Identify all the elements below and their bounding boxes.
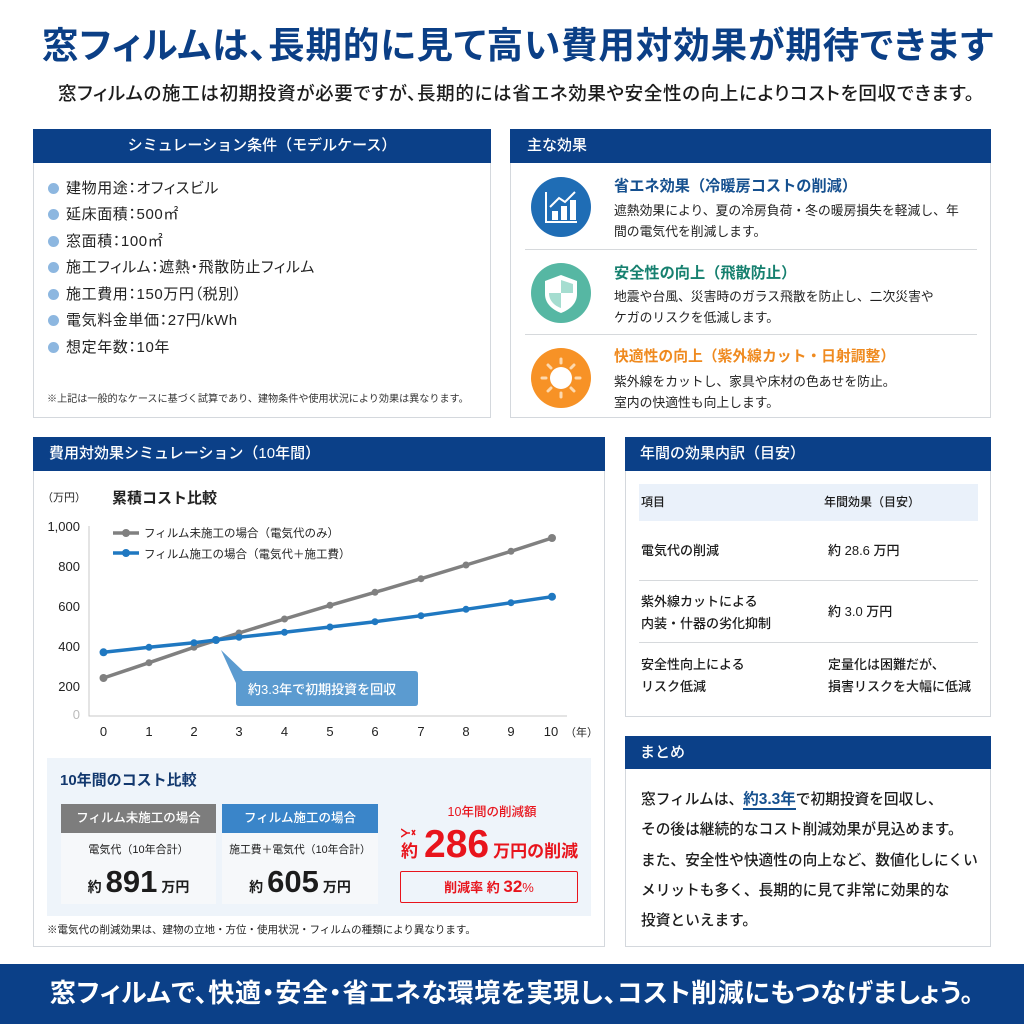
list: conditions: 建物用途：オフィスビル [66,180,219,197]
chart: cumulative cost [42,489,598,739]
summary text: メリットも多く、長期的に見て非常に効果的な [641,883,949,899]
heading: summary: まとめ [640,744,685,761]
summary text: 投資といえます。 [641,913,757,929]
callout [221,650,418,706]
summary text: また、安全性や快適性の向上など、数値化しにくい [641,853,978,869]
callout: 約3.3年で初期投資を回収 [248,682,396,697]
card: without film: 電気代（10年合計） [88,844,189,856]
chart: cumulative cost: 3 [235,724,243,739]
savings: 10年間の削減額 [448,805,536,819]
card: with film: 約605 万円 [249,864,351,899]
list: conditions [48,180,315,356]
panel: annual breakdown [625,437,991,717]
savings: 約286万円の削減 [401,823,578,866]
chart: cumulative cost: 6 [371,724,379,739]
effect text: comfort [614,374,896,410]
table: 年間効果（目安） [824,495,920,509]
footer banner [0,964,1024,1024]
chart: cumulative cost: 10 [544,724,558,739]
table: 損害リスクを大幅に低減 [828,679,971,694]
effect text: safety: ケガのリスクを低減します。 [614,310,779,324]
effect text: comfort: 室内の快適性も向上します。 [614,394,779,410]
chart: cumulative cost: 5 [326,724,334,739]
list: conditions: 施工フィルム：遮熱・飛散防止フィルム [66,259,315,276]
effect text: safety: 地震や台風、災害時のガラス飛散を防止し、二次災害や [614,289,934,304]
summary text: 窓フィルムは、約3.3年で初期投資を回収し、 [641,791,943,808]
chart: cumulative cost: 累積コスト比較 [112,489,217,507]
panel: main effects [510,129,991,418]
table: 定量化は困難だが、 [828,657,945,672]
heading: comparison: 10年間のコスト比較 [60,772,197,789]
icon: energy chart [531,177,591,237]
note: conditions: ※上記は一般的なケースに基づく試算であり、建物条件や使用状況により効果は異なります。 [47,394,469,405]
savings [400,805,578,903]
effect heading: energy: 省エネ効果（冷暖房コストの削減） [614,178,857,195]
panel: simulation [33,437,605,947]
list: conditions: 電気料金単価：27円/kWh [66,312,238,329]
card: with film: フィルム施工の場合 [244,811,356,825]
heading: simulation [33,437,605,471]
heading: breakdown: 年間の効果内訳（目安） [640,445,805,462]
line: with film [100,593,556,656]
table: 項目 [641,495,665,509]
heading: summary [625,736,991,769]
list: conditions: 想定年数：10年 [66,339,170,356]
card: without film [61,804,216,904]
table: 内装・什器の劣化抑制 [641,616,771,631]
legend: フィルム未施工の場合（電気代のみ） [144,526,339,540]
list: conditions: 施工費用：150万円（税別） [66,286,242,303]
table: 約 3.0 万円 [828,604,892,619]
list: conditions: 窓面積：100㎡ [66,233,163,250]
chart: cumulative cost: 200 [58,679,80,694]
panel: simulation conditions [33,129,491,418]
panel: 10-year comparison [47,758,591,916]
savings: 削減率 約 32% [444,877,534,896]
note: comparison: ※電気代の削減効果は、建物の立地・方位・使用状況・フィルムの種類により異なります。 [47,924,476,936]
footer banner: 窓フィルムで、快適・安全・省エネな環境を実現し、コスト削減にもつなげましょう。 [50,978,974,1008]
chart: cumulative cost: 2 [190,724,198,739]
effect text: safety [614,289,934,324]
chart: cumulative cost: 400 [58,639,80,654]
table: リスク低減 [641,679,706,694]
legend [113,526,351,561]
table [639,484,978,694]
chart: cumulative cost: 1 [145,724,153,739]
line: without film [100,534,556,682]
icon: shield [531,263,591,323]
chart: cumulative cost: 7 [417,724,425,739]
chart: cumulative cost: 0 [73,707,80,722]
effect text: energy: 間の電気代を削減します。 [614,224,766,238]
heading: main effects [510,129,991,163]
summary text: その後は継続的なコスト削減効果が見込めます。 [641,822,963,838]
card: without film: 約891 万円 [88,864,189,899]
chart: cumulative cost: 4 [281,724,288,739]
legend: フィルム施工の場合（電気代＋施工費） [144,547,351,561]
heading: main effects: 主な効果 [527,137,587,154]
table: 紫外線カットによる [641,594,758,609]
chart: cumulative cost: （年） [565,725,598,739]
chart: cumulative cost: 0 [100,724,107,739]
table: 約 28.6 万円 [828,543,900,558]
effect text: energy [614,203,959,238]
chart: cumulative cost: （万円） [42,491,86,504]
effect heading: comfort: 快適性の向上（紫外線カット・日射調整） [614,349,895,365]
list: conditions: 延床面積：500㎡ [66,206,179,223]
heading: breakdown [625,437,991,471]
chart: cumulative cost: 9 [507,724,515,739]
effect text: comfort: 紫外線をカットし、家具や床材の色あせを防止。 [614,374,896,389]
subtitle: 窓フィルムの施工は初期投資が必要ですが、長期的には省エネ効果や安全性の向上によりコストを回収できます。 [58,83,975,104]
chart: cumulative cost: 800 [58,559,80,574]
title: 窓フィルムは、長期的に見て高い費用対効果が期待できます [42,25,994,66]
summary text [641,790,978,929]
chart: cumulative cost: 600 [58,599,80,614]
icon: cut arrow [401,828,416,838]
table: 安全性向上による [641,657,745,672]
table: 電気代の削減 [641,543,719,558]
heading: simulation: 費用対効果シミュレーション（10年間） [49,445,320,462]
heading: conditions [33,129,491,163]
effect text: energy: 遮熱効果により、夏の冷房負荷・冬の暖房損失を軽減し、年 [614,203,959,218]
card: without film: フィルム未施工の場合 [76,811,201,825]
chart: cumulative cost: 8 [462,724,470,739]
card: with film [222,804,378,904]
panel: summary [625,736,991,947]
effect heading: safety: 安全性の向上（飛散防止） [614,265,796,282]
icon: sun [531,348,591,408]
heading: conditions: シミュレーション条件（モデルケース） [128,137,396,154]
card: with film: 施工費＋電気代（10年合計） [229,844,371,856]
chart: cumulative cost: 1,000 [47,519,80,534]
